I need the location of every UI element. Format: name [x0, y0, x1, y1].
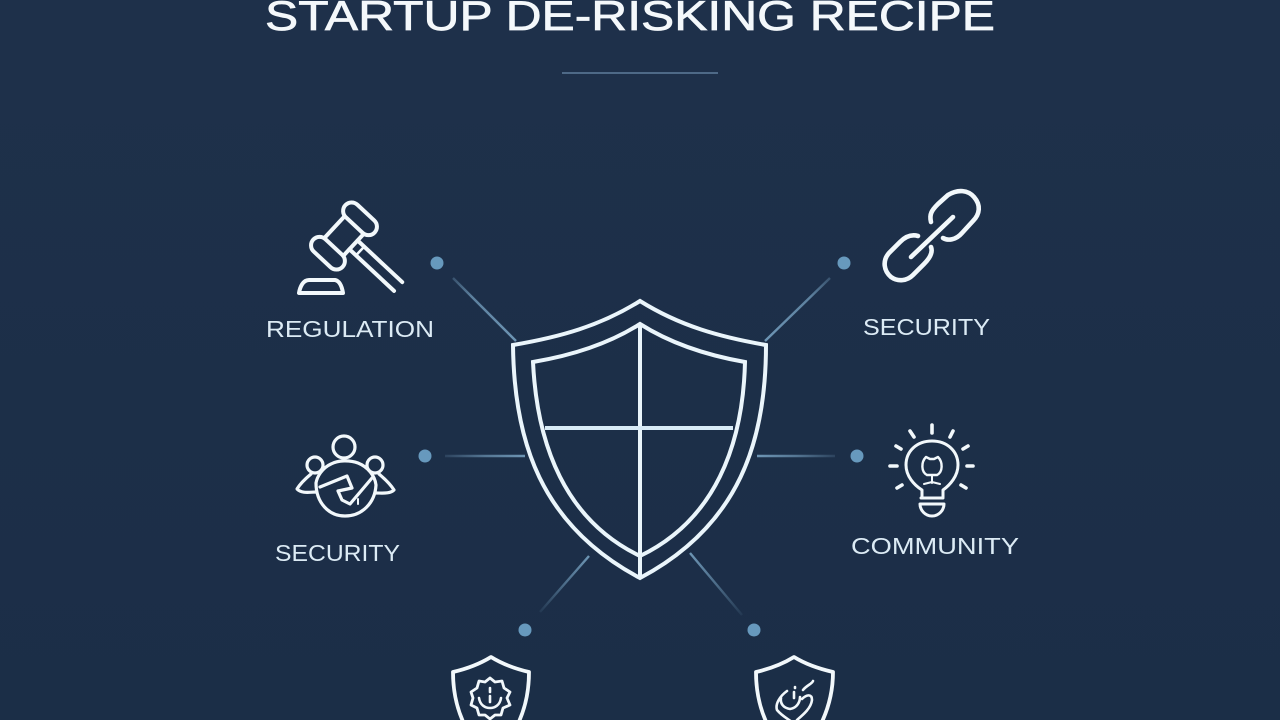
label: security top right: SECURITY [863, 314, 990, 340]
icon: light bulb [890, 425, 973, 516]
icon: small shield with hand [756, 657, 833, 720]
panel: security top right [863, 191, 990, 340]
icon: gavel [299, 199, 420, 310]
label: security left: SECURITY [275, 540, 400, 566]
icon: central shield [513, 301, 766, 578]
panel: regulation [266, 199, 434, 342]
label: regulation: REGULATION [266, 316, 434, 342]
connector lines [445, 278, 835, 615]
connector dots [418, 256, 864, 636]
icon: small shield with gear [453, 657, 529, 720]
icon: chain link [885, 191, 979, 280]
title underline [562, 72, 718, 74]
label: community: COMMUNITY [851, 533, 1019, 559]
panel: security left [275, 436, 400, 566]
icon: people with handshake [297, 436, 394, 516]
panel: community [851, 425, 1019, 559]
